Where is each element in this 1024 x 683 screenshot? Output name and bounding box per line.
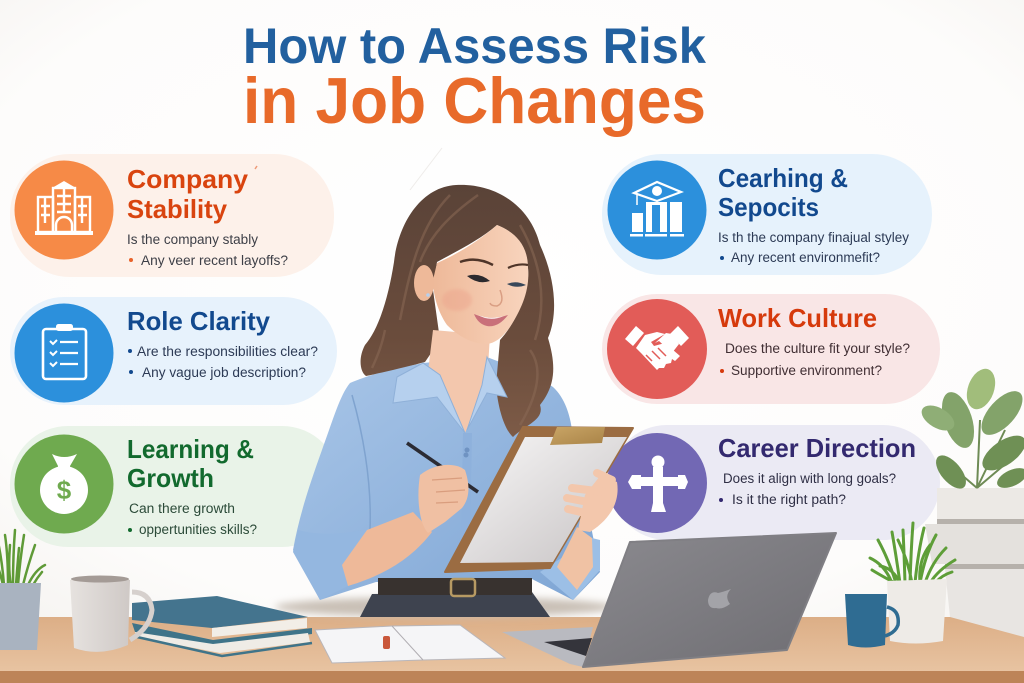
woman xyxy=(293,185,600,617)
button placket xyxy=(461,433,472,548)
top book cover xyxy=(132,596,308,628)
heading xyxy=(718,163,848,222)
heading: Career Direction xyxy=(718,433,916,463)
title: How to Assess Risk xyxy=(243,18,706,74)
sleeve fold xyxy=(352,395,370,530)
panel: coaching and supports xyxy=(602,154,932,275)
lower book cover xyxy=(132,623,312,646)
body text: Are the responsibilities clear? xyxy=(137,344,318,359)
keyboard xyxy=(544,638,592,656)
heading: Work Culture xyxy=(718,303,877,333)
metal clip xyxy=(550,427,605,445)
body text: Does the culture fit your style? xyxy=(725,341,910,356)
icon: graduation cap over bars xyxy=(608,160,706,260)
rolled sleeve cuff xyxy=(293,529,370,600)
title xyxy=(243,18,706,137)
heading: Role Clarity xyxy=(127,306,271,336)
paper sheet xyxy=(460,437,627,563)
small red marker xyxy=(383,636,390,649)
heading: Sepocits xyxy=(718,192,819,222)
small right plant xyxy=(870,523,955,644)
lower book edge xyxy=(137,637,312,656)
smile teeth xyxy=(478,315,504,319)
body text xyxy=(719,471,896,507)
icon: signpost cross xyxy=(607,433,707,533)
desk xyxy=(0,617,1024,683)
body text: Is th the company finajual styley xyxy=(718,230,909,245)
writing hand xyxy=(418,465,468,533)
body text xyxy=(718,230,909,265)
hair xyxy=(361,185,554,437)
books xyxy=(132,596,312,656)
lower book pages xyxy=(135,632,310,653)
icon: money bag: $ xyxy=(57,475,72,505)
left plant xyxy=(0,530,45,650)
panel: company stability xyxy=(10,154,334,277)
panel: career direction xyxy=(607,425,940,540)
body text: Any vague job description? xyxy=(142,365,306,380)
belt buckle xyxy=(451,579,475,596)
heading xyxy=(127,164,249,224)
shirt buttons xyxy=(464,448,470,458)
open notebook xyxy=(315,625,505,663)
body text: Supportive environment? xyxy=(731,363,882,378)
grass xyxy=(870,523,955,583)
brows and eyes xyxy=(460,260,528,287)
mouth xyxy=(474,314,508,326)
ear xyxy=(414,265,434,301)
laptop base xyxy=(502,627,593,667)
panel: work culture xyxy=(602,294,940,404)
shirt xyxy=(293,357,600,600)
pen xyxy=(407,443,478,492)
right cuff xyxy=(540,538,600,600)
faint sketch line xyxy=(410,148,442,190)
white pot xyxy=(887,579,947,644)
body text: oppertunities skills? xyxy=(139,522,257,537)
shadow behind woman xyxy=(275,597,615,617)
blue mug xyxy=(845,594,898,648)
hair strands xyxy=(372,195,541,425)
body text: Is the company stably xyxy=(127,232,258,247)
icon: clipboard xyxy=(14,304,114,402)
icon: money bag xyxy=(14,434,114,534)
body text xyxy=(128,501,257,537)
body text xyxy=(720,341,910,378)
title: in Job Changes xyxy=(243,64,706,137)
pot xyxy=(0,583,41,650)
grass xyxy=(0,530,45,585)
pants xyxy=(360,592,550,617)
collar xyxy=(393,357,507,433)
belt xyxy=(378,578,532,595)
laptop xyxy=(502,533,836,667)
large planter xyxy=(925,488,1024,637)
holding hand xyxy=(567,473,618,532)
face xyxy=(433,225,528,344)
body text: Does it align with long goals? xyxy=(723,471,896,486)
top book pages xyxy=(212,618,307,637)
panel: role clarity xyxy=(10,297,337,405)
body text: Is it the right path? xyxy=(732,492,846,507)
neck xyxy=(427,330,490,433)
heading: Cearhing & xyxy=(718,163,848,193)
body text xyxy=(127,232,288,268)
heading: Company xyxy=(127,164,249,194)
body text: Any veer recent layoffs? xyxy=(141,253,288,268)
panel: learning and growth xyxy=(10,426,340,547)
heading: Stability xyxy=(127,194,228,224)
earring xyxy=(426,293,430,297)
body text: Any recent environmefit? xyxy=(731,250,880,265)
clipboard xyxy=(445,427,633,572)
left forearm xyxy=(342,512,432,586)
white mug xyxy=(70,576,152,652)
body text xyxy=(128,344,318,380)
laptop lid xyxy=(583,533,836,667)
heading xyxy=(127,434,254,493)
logo xyxy=(708,589,731,608)
nose xyxy=(490,290,502,306)
right forearm xyxy=(557,527,593,590)
body text: Can there growth xyxy=(129,501,235,516)
heading: Growth xyxy=(127,463,214,493)
heading: Learning & xyxy=(127,434,254,464)
icon: building xyxy=(14,160,114,260)
cheek blush xyxy=(442,289,472,311)
large plant leaves xyxy=(917,365,1024,494)
orange tick mark xyxy=(255,166,257,169)
icon: handshake xyxy=(607,299,707,399)
